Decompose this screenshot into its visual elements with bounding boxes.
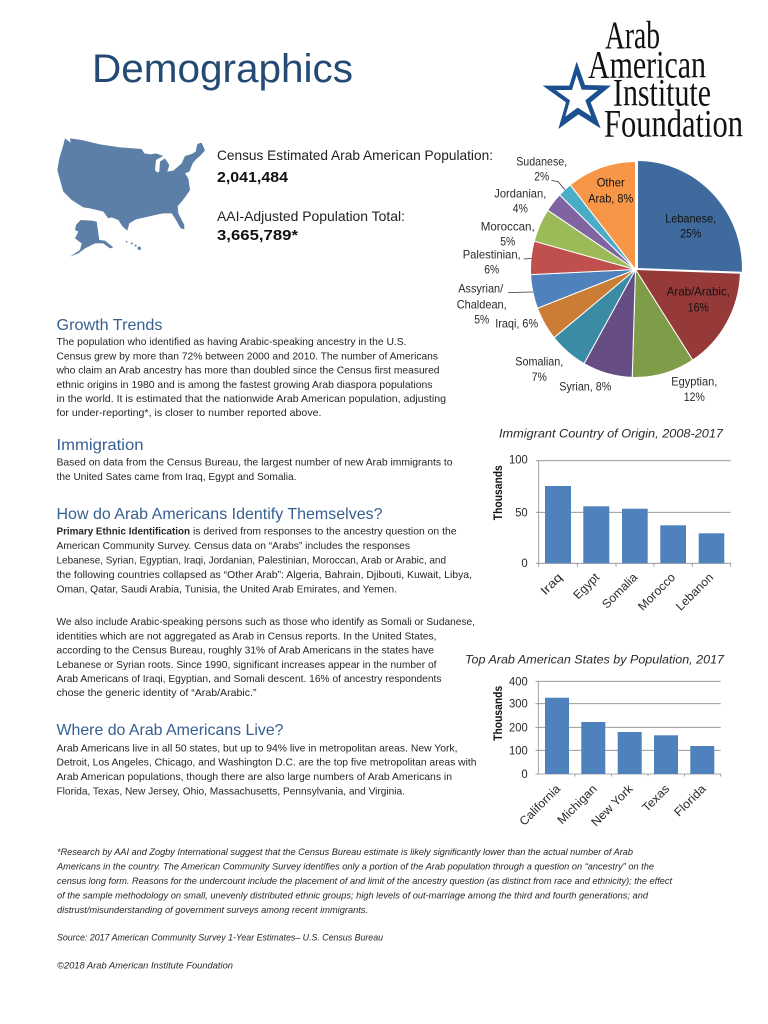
- growth trends text: The population who identified as having Arabic-speaking ancestry in the U.S.: [56, 337, 406, 348]
- where text: Detroit, Los Angeles, Chicago, and Washington D.C. are the top five metropolitan areas with: [56, 758, 477, 769]
- x axis labels: Egypt: [570, 570, 603, 602]
- logo wordmark: Institute: [613, 72, 711, 114]
- bars: [545, 698, 714, 774]
- logo: Arab American Institute Foundation: [543, 14, 743, 146]
- pie labels: Sudanese,: [516, 156, 567, 169]
- gridlines and axes: [536, 681, 721, 776]
- identification paragraph one: is derived from responses to the ancestry question on the: [193, 527, 457, 538]
- pie labels: Palestinian,: [463, 249, 521, 262]
- identification paragraph one: Lebanese, Syrian, Egyptian, Iraqi, Jordanian, Palestinian, Moroccan, Arab or Arabic, and: [56, 556, 446, 566]
- identification paragraph two: according to the Census Bureau, roughly 31% of Arab Americans in the states have: [56, 646, 434, 657]
- heading: immigration: Immigration: [56, 437, 144, 454]
- heading: where: Where do Arab Americans Live?: [56, 722, 284, 739]
- x axis labels: Michigan: [554, 782, 600, 827]
- panel: immigration: [56, 437, 453, 483]
- icon: map of the United States: [57, 138, 205, 257]
- x axis labels: Iraq: [538, 570, 565, 598]
- title: Demographics: [92, 47, 353, 91]
- source line: Source: 2017 American Community Survey 1-Year Estimates– U.S. Census Bureau: [57, 932, 384, 943]
- pie chart: ancestry: [457, 156, 742, 404]
- pie labels: [457, 156, 730, 404]
- where text: Florida, Texas, New Jersey, Ohio, Massachusetts, Pennsylvania, and Virginia.: [56, 786, 405, 797]
- x axis labels: Texas: [639, 782, 672, 815]
- identification paragraph two: Arab Americans of Iraqi, Egyptian, and Somali descent. 16% of ancestry respondents: [56, 674, 442, 685]
- x axis labels: [516, 781, 709, 829]
- icon: blue star: [543, 62, 611, 129]
- pie labels: 7%: [532, 371, 547, 384]
- where text: [56, 744, 477, 797]
- growth trends text: Census grew by more than 72% between 2000 and 2010. The number of Americans: [56, 351, 438, 362]
- gridlines and axes: [536, 461, 731, 567]
- footnote: census long form. Reasons for the undercount include the placement of and limit of the ancestry question (as distinct from race and ethnicity); the effect: [57, 875, 672, 886]
- x axis labels: Florida: [671, 781, 709, 819]
- where text: Arab American populations, though there are also large numbers of Arab Americans in: [56, 772, 452, 783]
- adjusted population label: AAI-Adjusted Population Total:: [217, 208, 405, 224]
- chart title: Immigrant Country of Origin, 2008-2017: [499, 426, 724, 440]
- y axis labels: [509, 452, 528, 570]
- pie labels: Arab/Arabic,: [667, 286, 730, 299]
- pie labels: Assyrian/: [458, 283, 504, 296]
- bars: [545, 486, 724, 563]
- logo wordmark: American: [588, 44, 706, 86]
- identification paragraph one: American Community Survey. Census data on “Arabs” includes the responses: [56, 541, 410, 552]
- x axis labels: New York: [588, 781, 636, 829]
- pie labels: 4%: [513, 203, 528, 216]
- pie labels: Lebanese,: [665, 212, 716, 225]
- adjusted population number: 3,665,789*: [217, 227, 298, 244]
- panel: how do Arab Americans identify themselves: [56, 506, 475, 699]
- identification paragraph one: the following countries collapsed as “Other Arab”: Algeria, Bahrain, Djibouti, Kuwait, Libya,: [56, 570, 472, 581]
- growth trends text: ethnic origins in 1980 and is among the fastest growing Arab diaspora populations: [56, 380, 432, 391]
- identification paragraph two: [56, 617, 475, 699]
- pie labels: Jordanian,: [494, 188, 546, 201]
- identification paragraph one: Primary Ethnic Identification: [56, 527, 190, 538]
- y axis labels: 300: [509, 697, 528, 711]
- population statistics: [217, 147, 493, 244]
- logo wordmark: Arab: [605, 14, 660, 57]
- y axis labels: 400: [509, 674, 528, 688]
- bar chart: top Arab American states: [465, 652, 725, 829]
- panel: growth trends: [56, 317, 446, 419]
- pie labels: Syrian, 8%: [559, 381, 611, 394]
- identification paragraph two: identities which are not aggregated as Arab in Census reports. In the United States,: [56, 631, 436, 642]
- identification paragraph two: chose the generic identity of “Arab/Arabic.”: [56, 688, 257, 699]
- pie labels: 5%: [474, 313, 489, 326]
- footnote: [56, 846, 672, 915]
- pie slices: [530, 160, 742, 377]
- footnote: *Research by AAI and Zogby International suggest that the Census Bureau estimate is likely significantly lower than the actual number of Arab: [57, 846, 633, 857]
- census estimate number: 2,041,484: [217, 169, 289, 186]
- leader lines: [508, 180, 565, 292]
- logo wordmark: [588, 14, 743, 146]
- pie labels: Other: [597, 177, 625, 190]
- panel: where do Arab Americans live: [56, 722, 477, 797]
- footnote: of the sample methodology on small, unevenly distributed ethnic groups; high levels of out-marriage among the third and fourth generations; and: [57, 890, 649, 901]
- footnote: Americans in the country. The American Community Survey identifies only a portion of the Arab population through a question on “ancestry” on the: [56, 860, 654, 871]
- y axis title: Thousands: [493, 465, 505, 520]
- y axis labels: 0: [521, 767, 528, 781]
- heading: identification: How do Arab Americans Identify Themselves?: [56, 506, 383, 523]
- identification paragraph two: Lebanese or Syrian roots. Since 1990, significant increases appear in the number of: [56, 660, 437, 671]
- growth trends text: who claim an Arab ancestry has more than doubled since the Census first measured: [56, 366, 440, 376]
- x axis labels: [538, 570, 716, 613]
- y axis labels: 0: [521, 556, 528, 570]
- y axis labels: [509, 674, 528, 781]
- x axis labels: Lebanon: [673, 570, 716, 613]
- pie labels: 16%: [688, 302, 709, 315]
- identification paragraph two: We also include Arabic-speaking persons such as those who identify as Somali or Sudanese,: [56, 617, 475, 628]
- y axis labels: 200: [509, 720, 528, 734]
- pie labels: Somalian,: [515, 356, 563, 369]
- pie labels: Chaldean,: [457, 298, 507, 311]
- pie labels: 6%: [484, 263, 499, 276]
- pie labels: Iraqi, 6%: [495, 317, 538, 330]
- immigration text: Based on data from the Census Bureau, the largest number of new Arab immigrants to: [56, 458, 453, 468]
- growth trends text: for under-reporting*, is closer to number reported above.: [56, 408, 322, 419]
- immigration text: [56, 458, 453, 483]
- y axis labels: 50: [515, 506, 528, 520]
- identification paragraph one: [56, 527, 472, 596]
- x axis labels: California: [516, 781, 563, 828]
- copyright line: ©2018 Arab American Institute Foundation: [57, 960, 233, 971]
- pie labels: 25%: [680, 228, 701, 241]
- bar chart: immigrant country of origin: [493, 426, 731, 613]
- pie labels: 2%: [534, 171, 549, 184]
- pie labels: 5%: [500, 235, 515, 248]
- where text: Arab Americans live in all 50 states, but up to 94% live in metropolitan areas. New York,: [56, 744, 458, 755]
- pie labels: Moroccan,: [481, 221, 535, 234]
- growth trends text: in the world. It is estimated that the nationwide Arab American population, adjusting: [56, 394, 446, 405]
- census estimate label: Census Estimated Arab American Population:: [217, 147, 493, 163]
- x axis labels: Somalia: [599, 570, 640, 611]
- chart title: Top Arab American States by Population, 2017: [465, 652, 725, 666]
- x axis labels: Morocco: [635, 570, 678, 613]
- pie labels: Egyptian,: [671, 376, 717, 389]
- pie labels: 12%: [684, 391, 705, 404]
- y axis labels: 100: [509, 452, 528, 466]
- growth trends text: [56, 337, 446, 419]
- y axis labels: 100: [509, 743, 528, 757]
- y axis title: Thousands: [493, 686, 505, 741]
- heading: growth trends: Growth Trends: [56, 317, 162, 334]
- immigration text: the United Sates came from Iraq, Egypt and Somalia.: [56, 472, 296, 483]
- pie labels: Arab, 8%: [588, 193, 633, 206]
- identification paragraph one: Oman, Qatar, Saudi Arabia, Tunisia, the United Arab Emirates, and Yemen.: [56, 585, 397, 596]
- footnote: distrust/misunderstanding of government surveys among recent immigrants.: [57, 904, 368, 915]
